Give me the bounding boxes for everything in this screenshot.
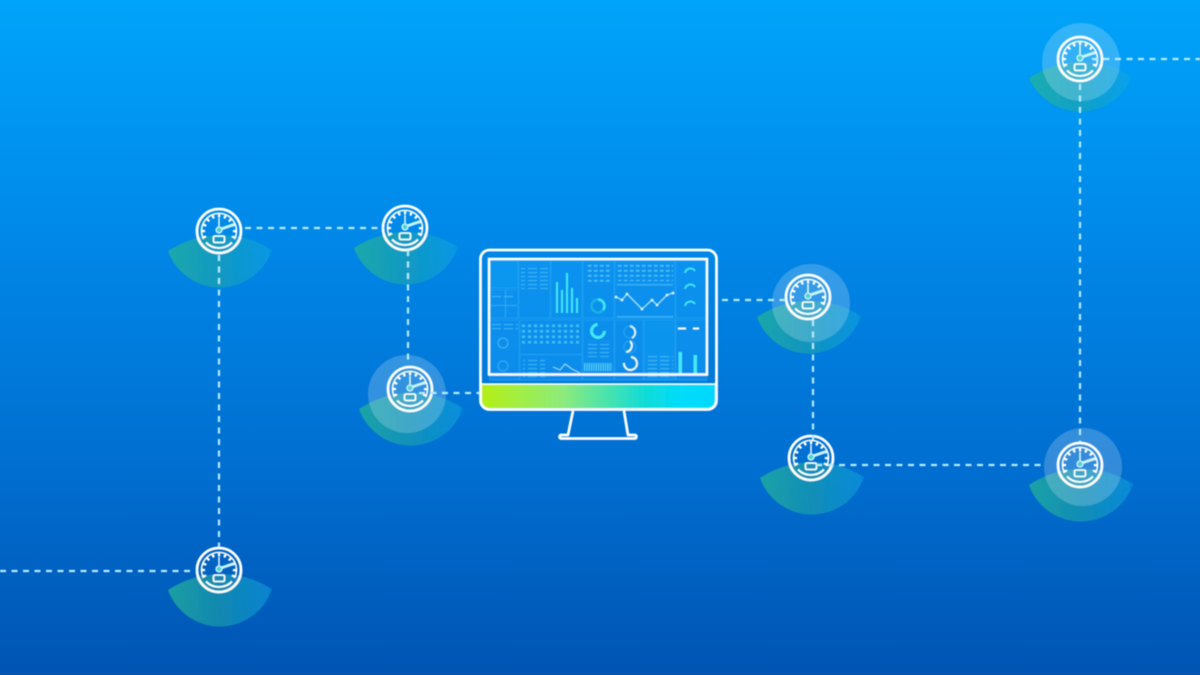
bar chart <box>557 273 577 313</box>
gauge node: top right <box>1029 23 1132 112</box>
gauge node: bottom left <box>168 548 272 627</box>
monitor stand <box>560 411 636 438</box>
screen backing <box>489 259 707 381</box>
monitor casing <box>480 250 716 410</box>
waveform <box>584 363 612 371</box>
gauge node: halo right of monitor <box>757 264 861 354</box>
gauge node: lower right <box>1029 428 1133 522</box>
gauge node: top middle <box>354 206 458 285</box>
dashboard panels <box>490 261 707 380</box>
monitor <box>480 250 716 438</box>
dashed connectors <box>0 59 1200 571</box>
colour strip <box>481 384 716 408</box>
dashboard screen content <box>490 261 707 380</box>
table rows <box>491 264 673 378</box>
gauge node: halo left of monitor <box>359 355 463 446</box>
gauge node: lower right-centre <box>760 436 864 515</box>
gauge node: left upper <box>168 209 272 288</box>
small line chart <box>553 364 580 373</box>
line chart <box>615 292 674 310</box>
donut charts <box>498 269 695 371</box>
level bars <box>678 328 699 374</box>
screen frame <box>489 259 707 374</box>
